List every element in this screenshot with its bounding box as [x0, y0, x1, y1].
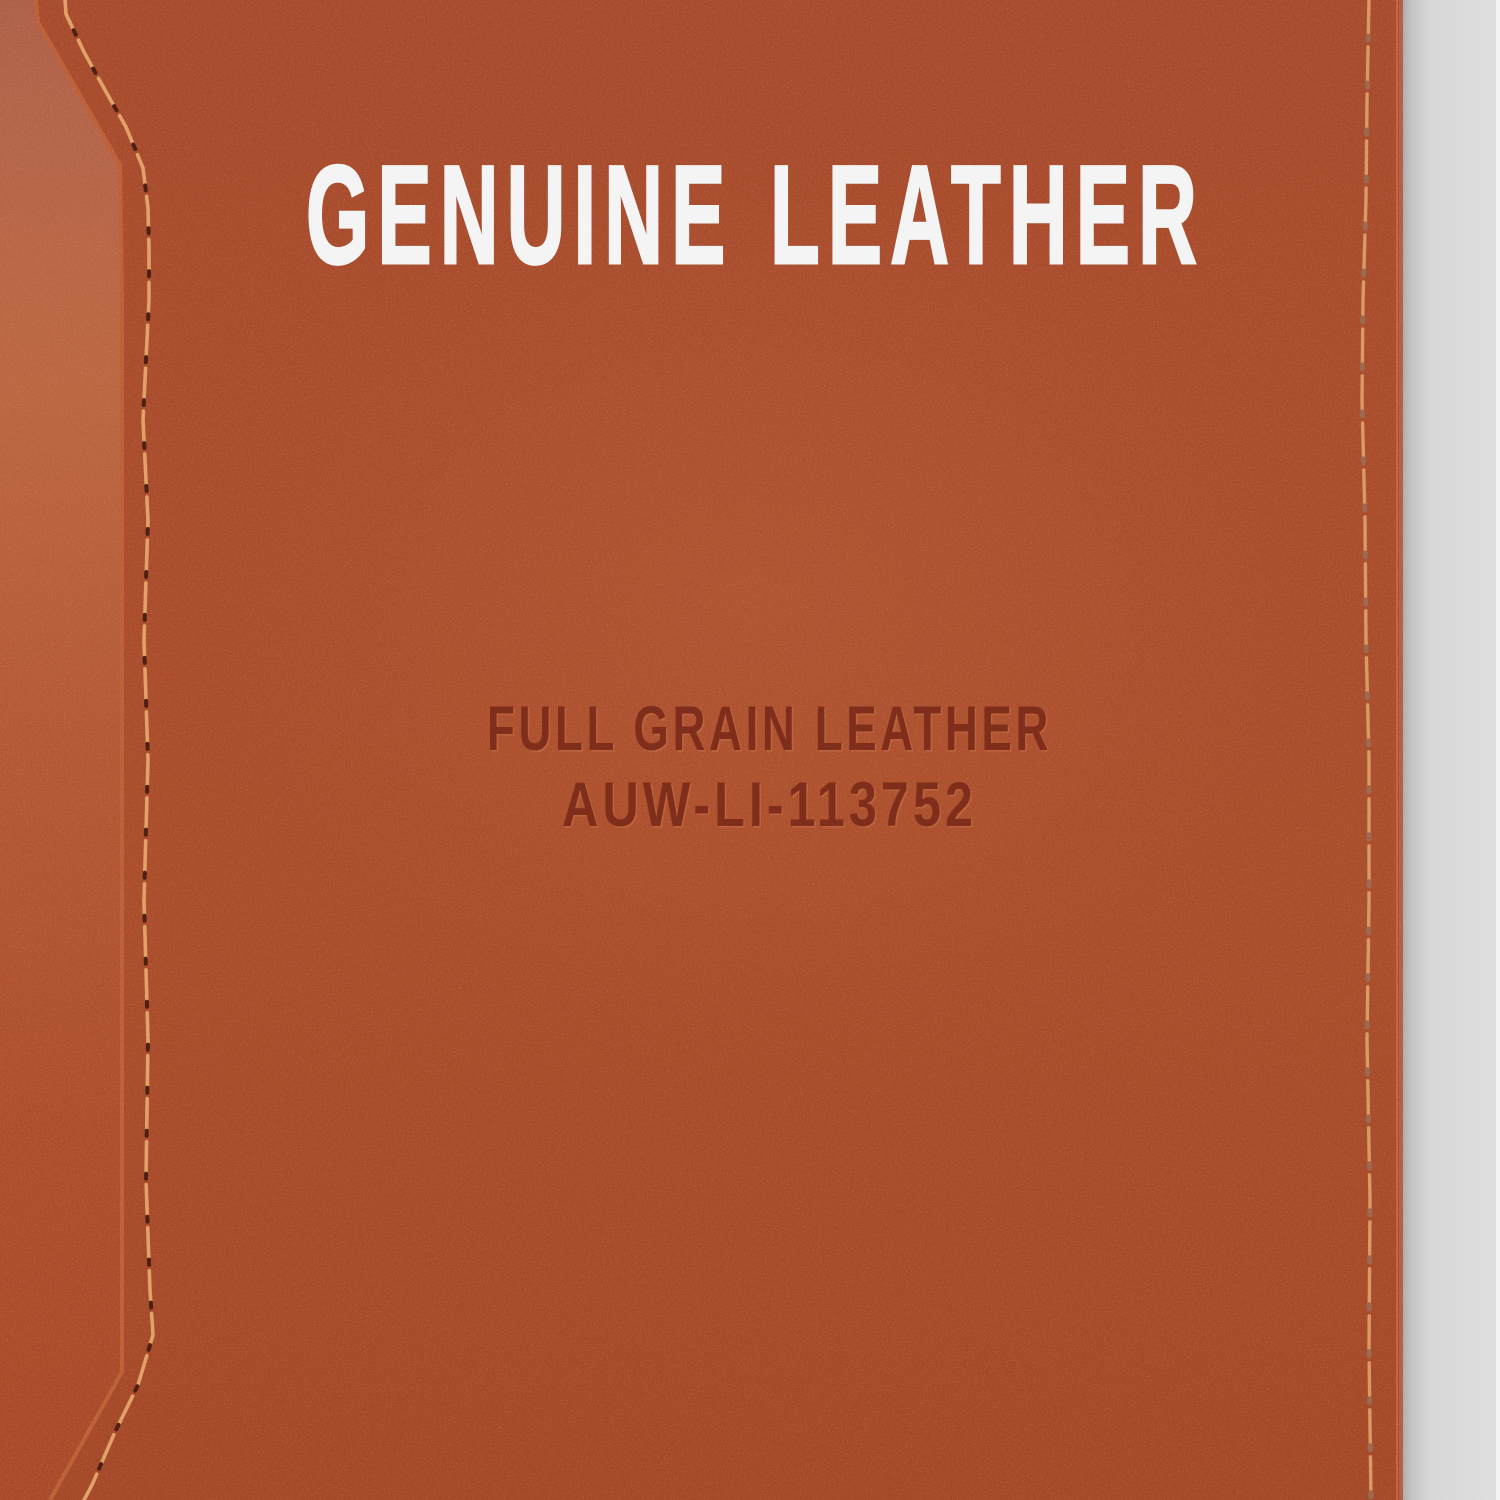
embossed text: full grain leather: FULL GRAIN LEATHER: [487, 694, 1052, 764]
embossed text: code: AUW-LI-113752: [564, 772, 978, 842]
embossed text: full grain leather: FULL GRAIN LEATHER: [488, 696, 1054, 766]
embossed text: code: AUW-LI-113752: [562, 770, 977, 840]
under panel: inner leather pocket: [0, 0, 130, 1500]
left stitching: [65, 0, 153, 1500]
grey background wall: [1400, 0, 1500, 1500]
right stitching: [1362, 0, 1371, 1500]
